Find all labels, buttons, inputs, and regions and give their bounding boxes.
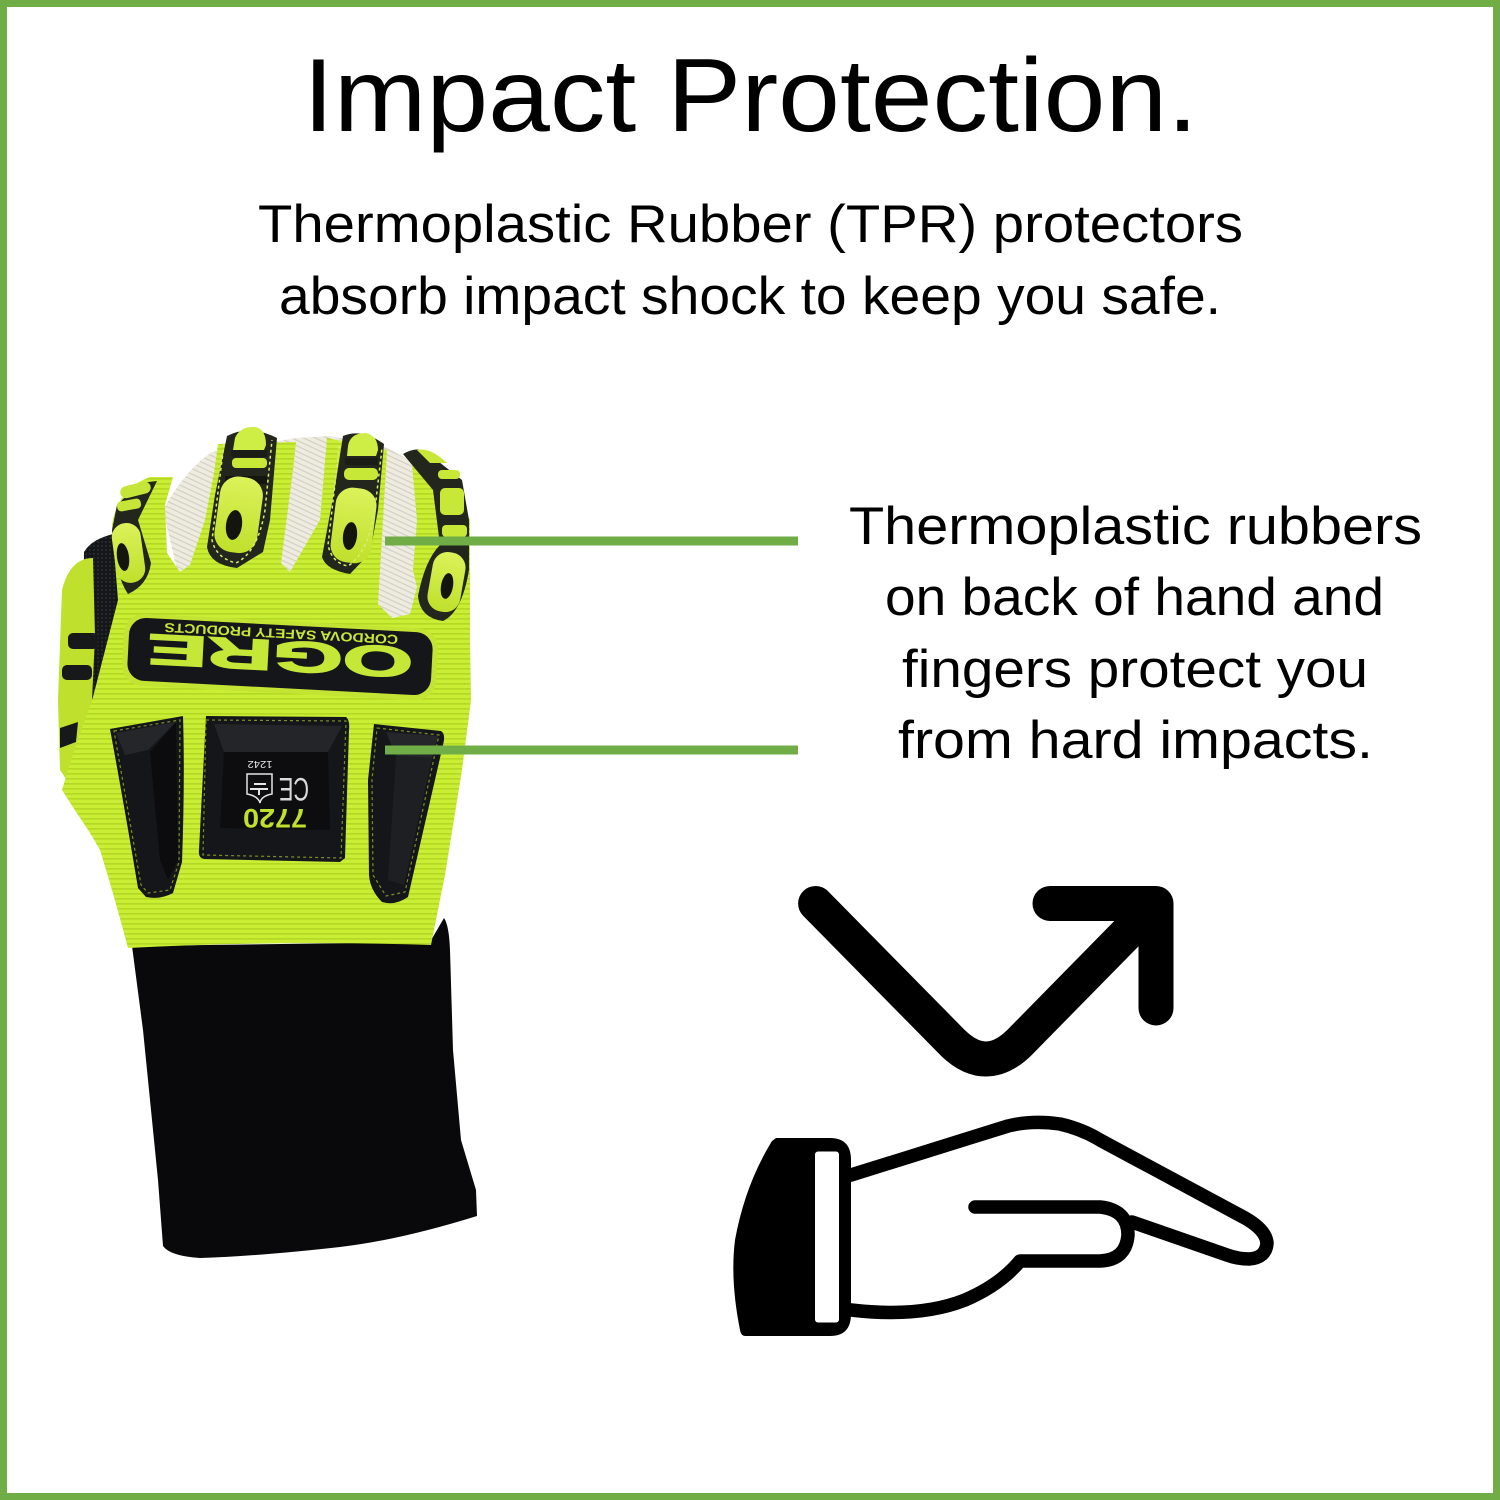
subtitle text block: Thermoplastic Rubber (TPR) protectors — [258, 195, 1243, 254]
left knuckle protector — [110, 716, 184, 898]
callout text block — [849, 497, 1422, 770]
hand outline — [851, 1122, 1267, 1312]
callout text block: fingers protect you — [902, 640, 1368, 699]
finger guard 2 — [207, 427, 277, 568]
icon: impact rebound arrow — [816, 904, 1156, 1059]
finger guard 1 — [110, 480, 157, 594]
logo text — [146, 619, 414, 686]
callout text block: from hard impacts. — [898, 711, 1373, 770]
lime knit hand body — [62, 438, 471, 948]
cuff inner band — [815, 1152, 839, 1322]
subtitle text block: absorb impact shock to keep you safe. — [279, 267, 1221, 326]
icon: protected hand — [733, 1122, 1267, 1336]
cotton knit between fingers — [163, 436, 419, 618]
logo text: CORDOVA SAFETY PRODUCTS — [164, 620, 398, 647]
thumb side black pad — [84, 533, 126, 712]
glove cuff — [132, 918, 477, 1258]
title: Impact Protection. — [303, 38, 1198, 154]
finger guard 4 — [403, 450, 469, 621]
subtitle text block — [258, 195, 1243, 326]
callout line: fingers — [385, 536, 798, 546]
glove photo illustration — [58, 427, 477, 1258]
callout text block: on back of hand and — [885, 568, 1384, 627]
thumb lime strip — [58, 558, 98, 782]
logo text: OGRE — [146, 624, 414, 686]
right knuckle protector — [368, 724, 444, 903]
standards shield — [247, 774, 272, 803]
finger guard 3 — [322, 433, 384, 574]
model number: 7720 — [243, 803, 307, 833]
callout text block: Thermoplastic rubbers — [849, 497, 1422, 556]
callout line: back of hand — [385, 746, 798, 754]
batch number: 1242 — [247, 758, 272, 769]
CE mark: CE — [279, 771, 309, 807]
OGRE logo plate — [121, 613, 439, 701]
hand cuff — [733, 1138, 851, 1336]
centre protector with marks — [199, 716, 349, 862]
